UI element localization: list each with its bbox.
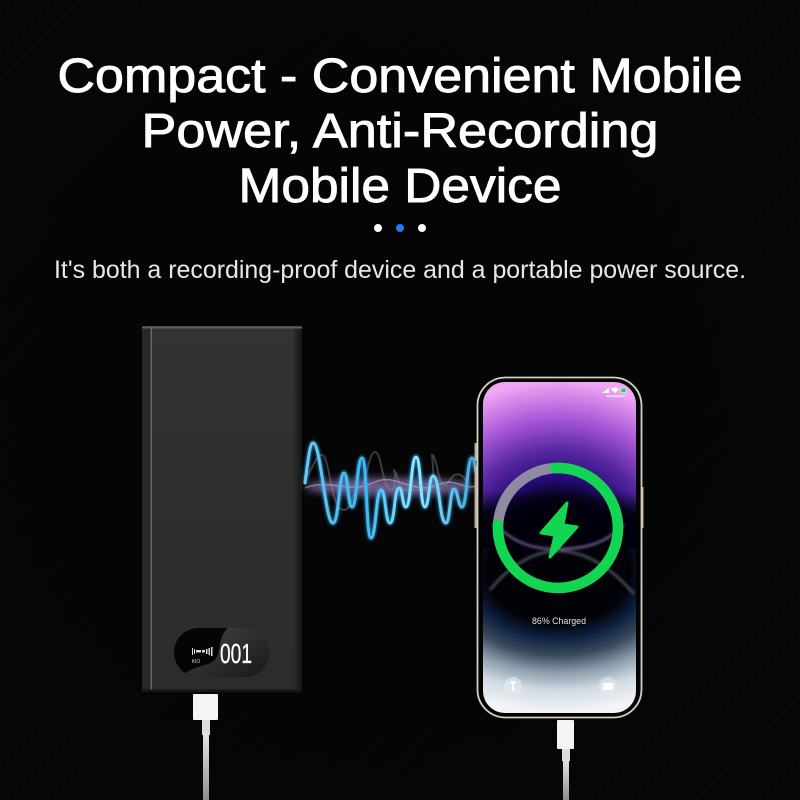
charge label: 86% Charged bbox=[532, 616, 586, 626]
subtitle: It's both a recording-proof device and a portable power source. bbox=[54, 256, 746, 284]
digits: 001 bbox=[220, 638, 252, 669]
purple haze band bbox=[305, 478, 475, 496]
lightning bolt bbox=[541, 503, 577, 557]
main wave bbox=[305, 443, 476, 538]
phone cable bbox=[557, 720, 574, 800]
phone screen bbox=[483, 382, 636, 713]
status bar bbox=[602, 388, 626, 397]
wave glow bbox=[305, 443, 476, 538]
title: Mobile Device bbox=[238, 160, 562, 213]
camera button bbox=[599, 677, 617, 695]
small display label: KIO bbox=[192, 659, 200, 665]
wallpaper arcs bbox=[490, 522, 634, 594]
charging ring bbox=[498, 468, 618, 588]
pagination dots bbox=[374, 224, 426, 232]
side buttons bbox=[474, 443, 644, 528]
phone bbox=[474, 376, 644, 800]
ghost wave bbox=[305, 452, 466, 510]
LED display bbox=[174, 628, 269, 677]
power bank bbox=[142, 326, 302, 800]
title: Compact - Convenient Mobile bbox=[58, 50, 742, 103]
title bbox=[58, 50, 742, 213]
flashlight button bbox=[504, 677, 522, 695]
signal icon bbox=[192, 647, 212, 656]
power bank body bbox=[142, 326, 302, 692]
title: Power, Anti-Recording bbox=[142, 105, 658, 158]
phone frame bbox=[478, 378, 642, 718]
USB plug and cable bbox=[193, 694, 218, 800]
sound wave bbox=[305, 443, 476, 538]
